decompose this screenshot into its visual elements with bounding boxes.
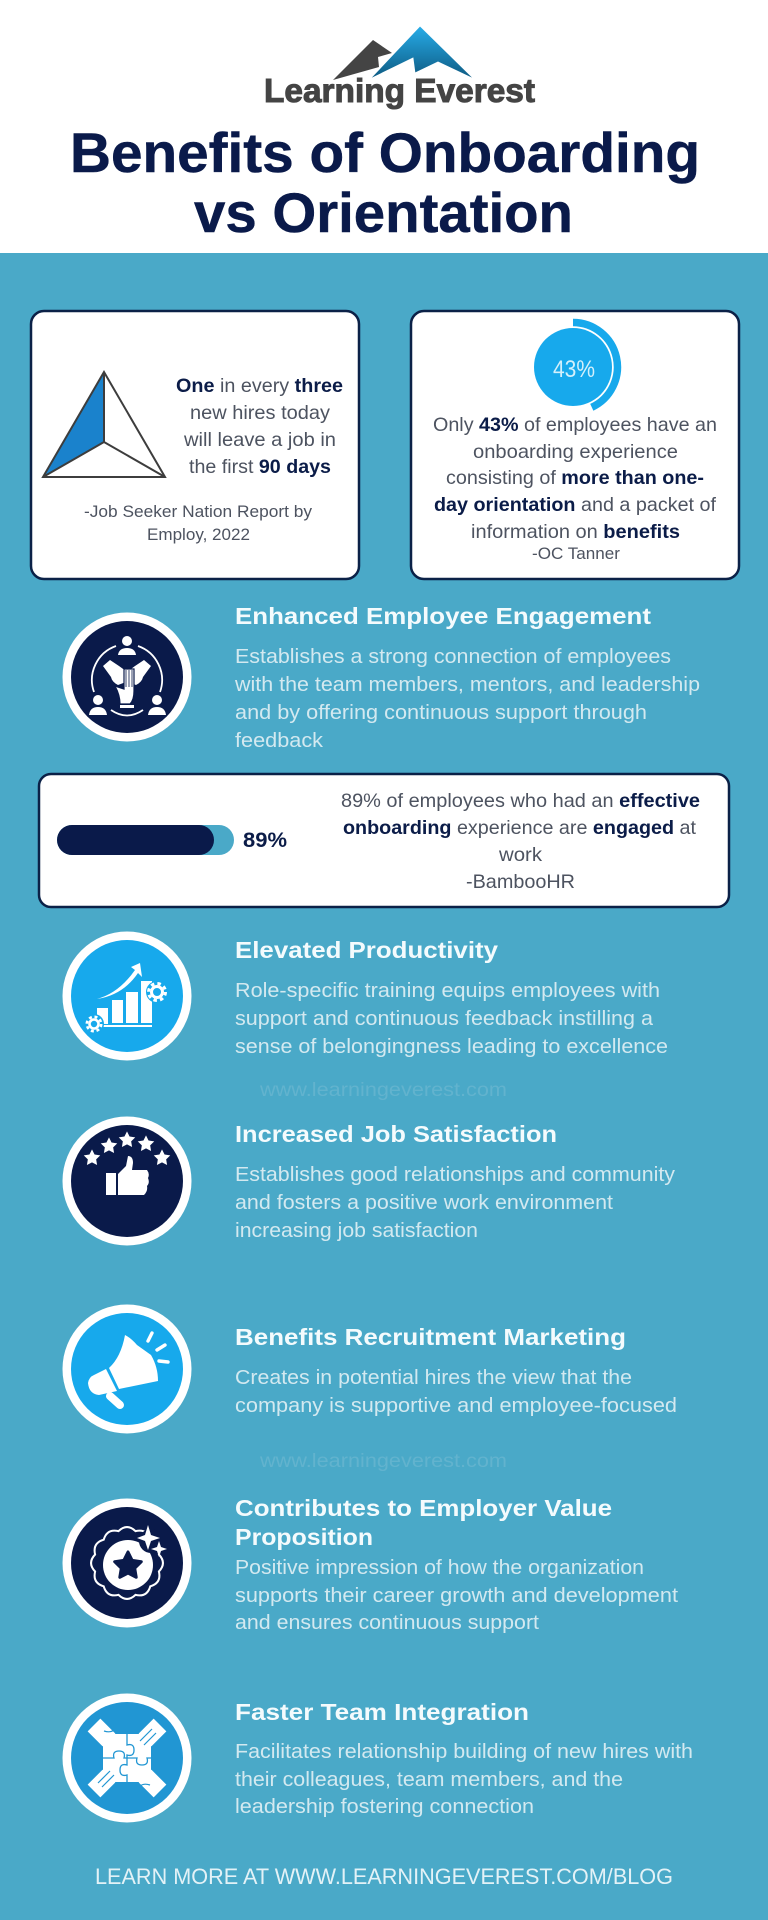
watermark: www.learningeverest.com bbox=[259, 1080, 507, 1101]
stat text: One in every three bbox=[176, 375, 343, 397]
panel: 43 percent stat card bbox=[411, 311, 739, 579]
title bbox=[70, 121, 700, 244]
stat text: day orientation and a packet of bbox=[434, 494, 717, 516]
stat text: Only 43% of employees have an bbox=[433, 414, 717, 436]
panel: 89 percent stat card bbox=[39, 774, 729, 907]
text: team integration description: their colleagues, team members, and the bbox=[235, 1768, 623, 1791]
text: job satisfaction description bbox=[235, 1163, 676, 1242]
heading: elevated productivity: Elevated Productivity bbox=[235, 937, 498, 963]
icon: team engagement bbox=[62, 612, 192, 742]
text: productivity description: support and continuous feedback instilling a bbox=[235, 1007, 654, 1030]
text: productivity description: sense of belongingness leading to excellence bbox=[235, 1035, 668, 1058]
source text: -OC Tanner bbox=[532, 544, 620, 563]
text: recruitment marketing description: company is supportive and employee-focused bbox=[235, 1394, 677, 1417]
text: team integration description bbox=[235, 1740, 693, 1818]
chart: 43 percent radial bbox=[534, 322, 617, 407]
footer call to action: LEARN MORE AT WWW.LEARNINGEVEREST.COM/BLOG bbox=[95, 1864, 673, 1889]
heading: contributes to employer value proposition: Contributes to Employer Value bbox=[235, 1495, 612, 1521]
heading: enhanced employee engagement: Enhanced Employee Engagement bbox=[235, 603, 651, 629]
stat text: the first 90 days bbox=[189, 456, 331, 478]
text: job satisfaction description: Establishes good relationships and community bbox=[235, 1163, 676, 1186]
stat text bbox=[176, 375, 343, 478]
stat text: new hires today bbox=[190, 402, 330, 424]
chart: 89 percent progress bar bbox=[57, 825, 287, 855]
icon: thumbs up with stars bbox=[62, 1116, 192, 1246]
stat text: work bbox=[498, 844, 542, 866]
text: recruitment marketing description: Creates in potential hires the view that the bbox=[235, 1366, 632, 1389]
heading: faster team integration: Faster Team Integration bbox=[235, 1699, 529, 1725]
heading: contributes to employer value proposition bbox=[235, 1495, 612, 1550]
source text bbox=[84, 502, 313, 544]
text: engagement description bbox=[234, 645, 700, 752]
watermark: www.learningeverest.com bbox=[259, 1451, 507, 1472]
chart: 89 percent progress bar: 89% bbox=[243, 829, 287, 852]
text: employer value description: Positive impression of how the organization bbox=[235, 1556, 644, 1579]
icon: megaphone bbox=[62, 1304, 192, 1434]
heading: contributes to employer value proposition: Proposition bbox=[235, 1524, 373, 1550]
text: engagement description: feedback bbox=[235, 729, 324, 752]
text: team integration description: leadership fostering connection bbox=[235, 1795, 534, 1818]
heading: increased job satisfaction: Increased Job Satisfaction bbox=[235, 1121, 557, 1147]
text: employer value description bbox=[235, 1556, 678, 1634]
heading: benefits recruitment marketing: Benefits Recruitment Marketing bbox=[235, 1324, 626, 1350]
text: job satisfaction description: and fosters a positive work environment bbox=[235, 1191, 613, 1214]
text: team integration description: Facilitates relationship building of new hires with bbox=[235, 1740, 693, 1763]
text: engagement description: with the team members, mentors, and leadership bbox=[234, 673, 700, 696]
icon: triangle one third filled bbox=[43, 372, 165, 477]
text: recruitment marketing description bbox=[235, 1366, 677, 1417]
title: vs Orientation bbox=[194, 181, 573, 244]
stat text: 89% of employees who had an effective bbox=[341, 790, 700, 812]
chart: 43 percent radial: 43% bbox=[553, 356, 595, 383]
stat text: -BambooHR bbox=[466, 871, 575, 893]
stat text bbox=[433, 414, 717, 543]
stat text: will leave a job in bbox=[183, 429, 336, 451]
stat text: onboarding experience are engaged at bbox=[343, 817, 697, 839]
source text: Employ, 2022 bbox=[147, 525, 250, 544]
icon: hands with puzzle bbox=[62, 1694, 192, 1822]
stat text: consisting of more than one- bbox=[446, 467, 704, 489]
text: engagement description: and by offering continuous support through bbox=[235, 701, 647, 724]
text: productivity description bbox=[235, 979, 668, 1058]
stat text: information on benefits bbox=[471, 521, 680, 543]
stat text bbox=[341, 790, 700, 893]
text: employer value description: and ensures continuous support bbox=[235, 1611, 539, 1634]
text: job satisfaction description: increasing job satisfaction bbox=[235, 1219, 478, 1242]
text: engagement description: Establishes a strong connection of employees bbox=[235, 645, 671, 668]
panel: one in three stat card bbox=[31, 311, 359, 579]
text: productivity description: Role-specific training equips employees with bbox=[235, 979, 660, 1002]
stat text: onboarding experience bbox=[473, 441, 678, 463]
logo: Learning Everest bbox=[264, 72, 535, 109]
icon: productivity chart bbox=[62, 932, 192, 1060]
logo bbox=[264, 26, 535, 109]
source text: -Job Seeker Nation Report by bbox=[84, 502, 313, 521]
text: employer value description: supports their career growth and development bbox=[235, 1584, 678, 1607]
title: Benefits of Onboarding bbox=[70, 121, 700, 184]
icon: value badge bbox=[62, 1498, 192, 1628]
